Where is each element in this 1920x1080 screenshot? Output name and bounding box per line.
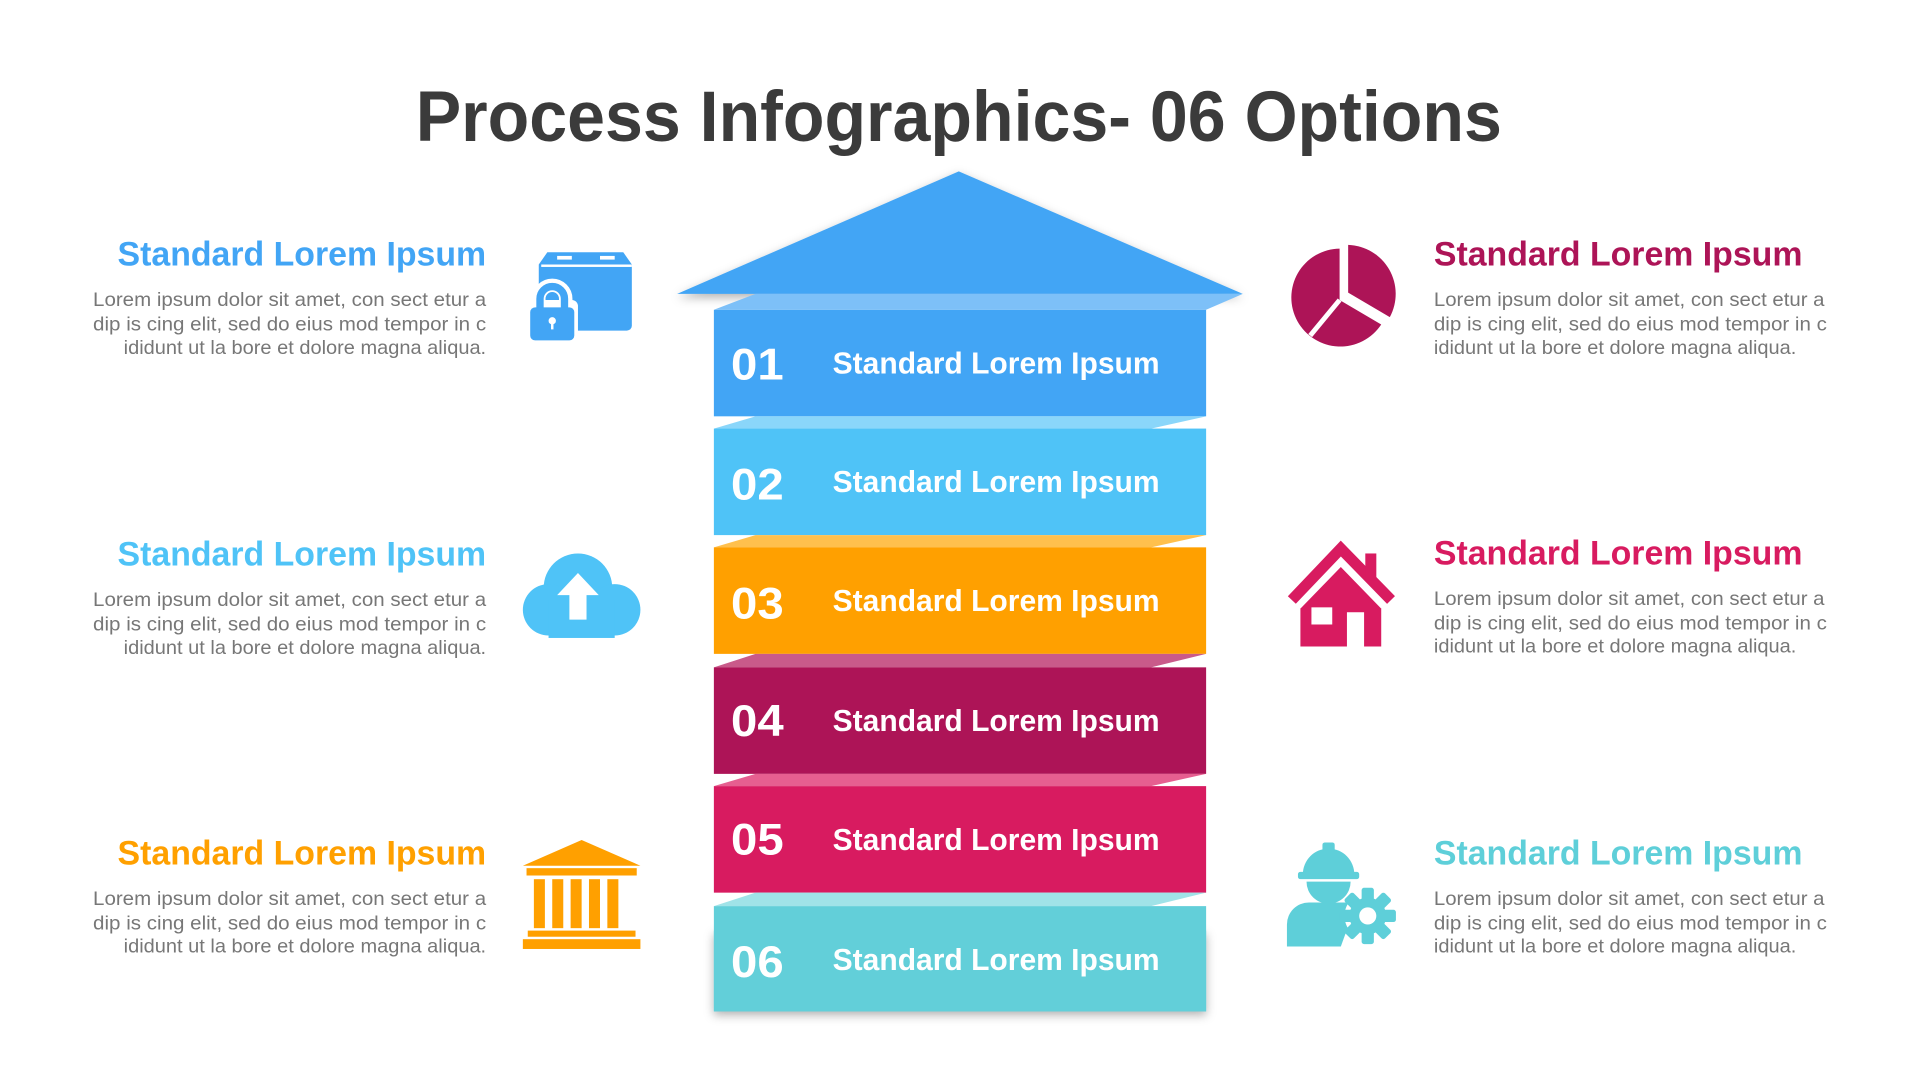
icon: worker with gear (1287, 842, 1396, 947)
text block: right 3: ididunt ut la bore et dolore magna aliqua. (1434, 936, 1796, 958)
text block: left 2: Standard Lorem Ipsum (118, 536, 486, 574)
text block: right 2: Lorem ipsum dolor sit amet, con sect etur a (1434, 588, 1825, 610)
band 02 (714, 416, 1206, 535)
text block: left 2: Lorem ipsum dolor sit amet, con sect etur a (93, 589, 486, 611)
text block: left 3: dip is cing elit, sed do eius mod tempor in c (93, 912, 486, 934)
text block: left 1: Lorem ipsum dolor sit amet, con sect etur a (93, 289, 486, 311)
band 04 (714, 654, 1206, 774)
arrow head (677, 171, 1243, 294)
text block: left 2 (93, 536, 486, 659)
text block: right 2 (1434, 534, 1827, 658)
icon: bank (523, 840, 640, 949)
text block: right 2: ididunt ut la bore et dolore magna aliqua. (1434, 636, 1796, 658)
band 01: 01 (731, 341, 784, 390)
text block: right 3: dip is cing elit, sed do eius mod tempor in c (1434, 912, 1827, 934)
band 05 (714, 774, 1206, 893)
text block: left 2: ididunt ut la bore et dolore magna aliqua. (124, 637, 486, 659)
text block: right 3 (1434, 834, 1827, 958)
band 05: 05 (731, 816, 784, 865)
band 03: 03 (731, 579, 784, 628)
band 02: Standard Lorem Ipsum (833, 465, 1160, 499)
icon: locked box (527, 252, 632, 344)
band 06: Standard Lorem Ipsum (833, 943, 1160, 977)
band 06: 06 (731, 938, 784, 987)
text block: left 1: ididunt ut la bore et dolore magna aliqua. (124, 337, 486, 359)
text block: right 1: dip is cing elit, sed do eius mod tempor in c (1434, 314, 1827, 336)
icon: cloud upload (523, 553, 640, 638)
band 03 (714, 535, 1206, 654)
text block: left 2: dip is cing elit, sed do eius mod tempor in c (93, 614, 486, 636)
text block: right 3: Standard Lorem Ipsum (1434, 834, 1802, 872)
text block: right 3: Lorem ipsum dolor sit amet, con sect etur a (1434, 888, 1825, 910)
text block: left 3: Lorem ipsum dolor sit amet, con sect etur a (93, 888, 486, 910)
icon: house (1292, 549, 1391, 647)
text block: left 3: Standard Lorem Ipsum (118, 834, 486, 872)
text block: left 1 (93, 236, 486, 359)
title: Process Infographics- 06 Options (416, 78, 1502, 157)
band 06 (714, 893, 1206, 1011)
band 01: Standard Lorem Ipsum (833, 346, 1160, 380)
band 04: Standard Lorem Ipsum (833, 704, 1160, 738)
text block: left 1: Standard Lorem Ipsum (118, 236, 486, 274)
band 03: Standard Lorem Ipsum (833, 584, 1160, 618)
band 04: 04 (731, 697, 784, 746)
text block: left 3: ididunt ut la bore et dolore magna aliqua. (124, 936, 486, 958)
band 01 (714, 294, 1243, 416)
text block: right 1: ididunt ut la bore et dolore magna aliqua. (1434, 337, 1796, 359)
band shadow base (714, 931, 1206, 1011)
band 02: 02 (731, 461, 784, 510)
icon: pie chart (1291, 245, 1396, 347)
band 05: Standard Lorem Ipsum (833, 823, 1160, 857)
text block: right 1: Lorem ipsum dolor sit amet, con sect etur a (1434, 289, 1825, 311)
text block: right 2: dip is cing elit, sed do eius mod tempor in c (1434, 612, 1827, 634)
text block: right 1: Standard Lorem Ipsum (1434, 236, 1802, 274)
text block: right 1 (1434, 236, 1827, 359)
text block: left 3 (93, 834, 486, 958)
text block: right 2: Standard Lorem Ipsum (1434, 534, 1802, 572)
text block: left 1: dip is cing elit, sed do eius mod tempor in c (93, 314, 486, 336)
